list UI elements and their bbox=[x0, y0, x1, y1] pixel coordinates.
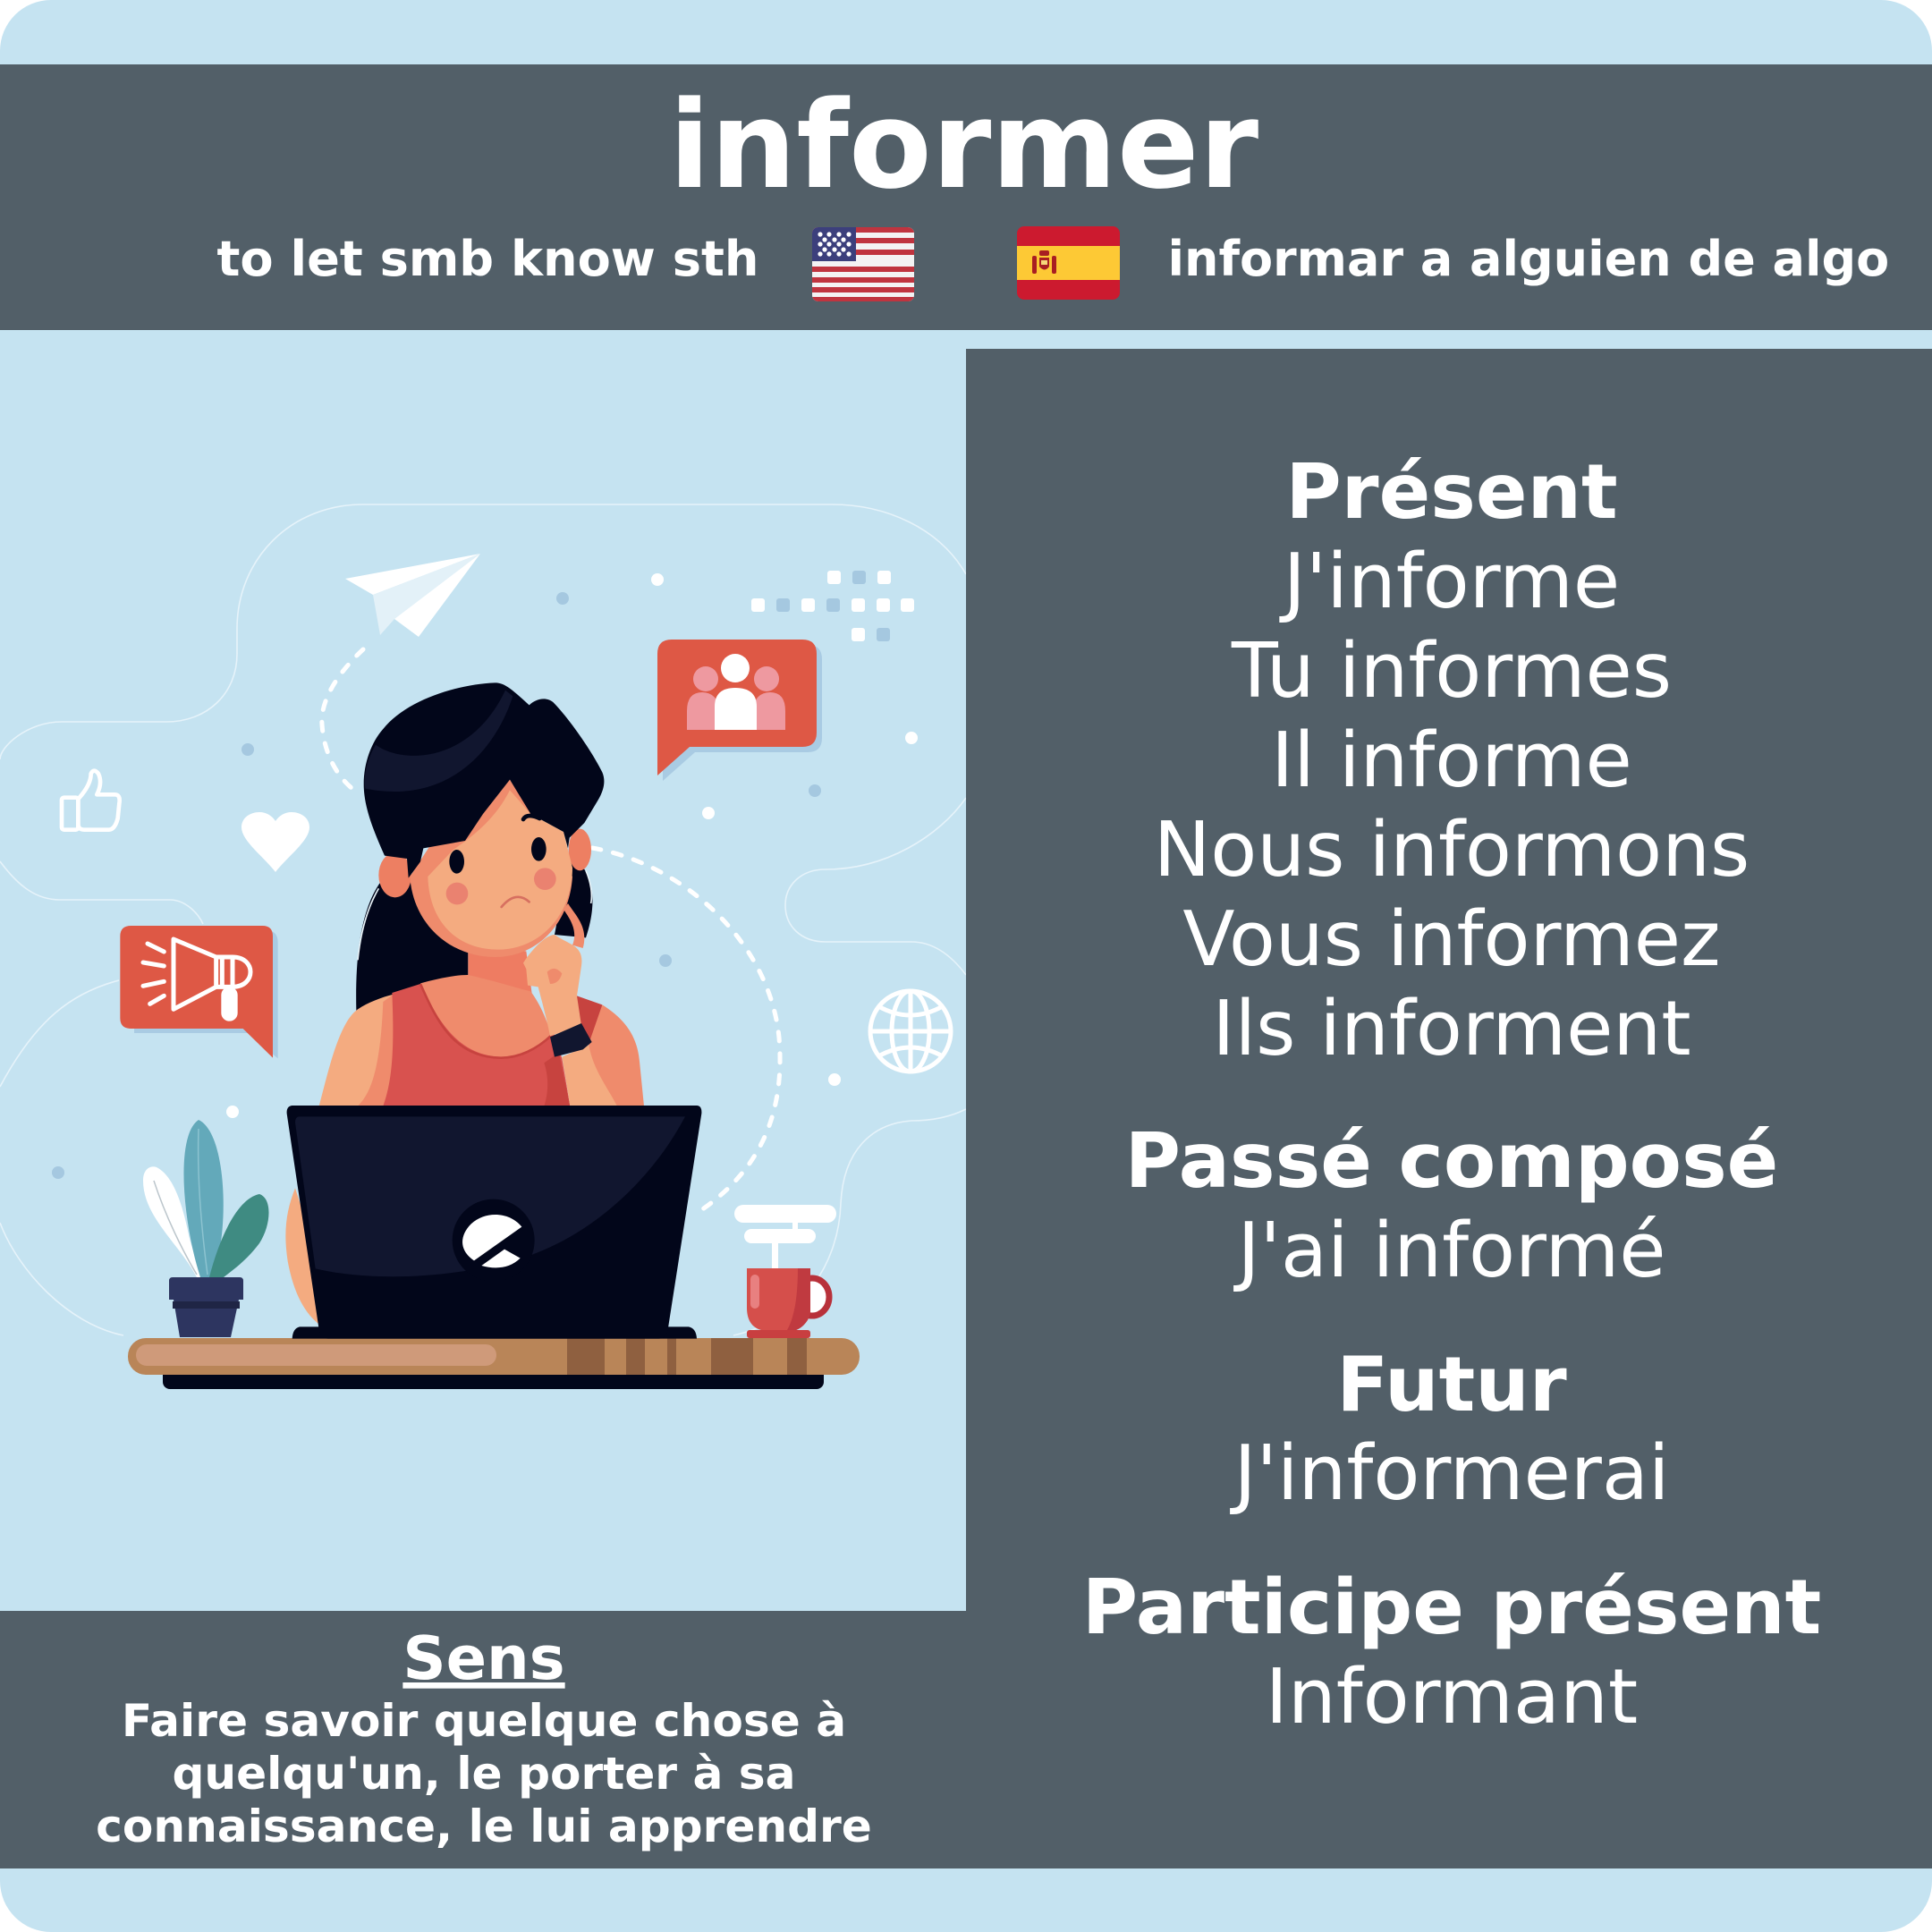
head bbox=[364, 682, 604, 957]
icon: US flag bbox=[812, 227, 914, 301]
icon: globe bbox=[870, 991, 951, 1072]
panel: illustration bbox=[0, 504, 966, 1389]
meaning text: connaissance, le lui apprendre bbox=[96, 1800, 872, 1852]
icon: Spanish flag bbox=[1017, 226, 1120, 300]
flight path dashes bbox=[322, 649, 363, 792]
icon: paper plane bbox=[345, 554, 480, 637]
tense: présent: Présent bbox=[1285, 448, 1618, 537]
tense: présent: Ils informent bbox=[1212, 985, 1691, 1073]
English translation: to let smb know sth bbox=[216, 231, 758, 287]
title: informer bbox=[669, 75, 1259, 216]
panel: conjugation background bbox=[966, 349, 1932, 1868]
Spanish translation: informar a alguien de algo bbox=[1168, 231, 1889, 287]
header band bbox=[0, 64, 1932, 330]
back hair bbox=[356, 856, 592, 1011]
tense: futur: Futur bbox=[1336, 1341, 1567, 1429]
panel: meaning background bbox=[0, 1611, 966, 1868]
decorative dots bbox=[52, 571, 918, 1179]
desk bbox=[128, 1338, 860, 1389]
conjugation list bbox=[1082, 448, 1821, 1741]
idea path dashes bbox=[592, 848, 780, 1214]
coffee mug bbox=[734, 1205, 836, 1338]
tense: présent: Nous informons bbox=[1154, 806, 1750, 894]
meaning text: quelqu'un, le porter à sa bbox=[172, 1747, 796, 1800]
tense: futur: J'informerai bbox=[1229, 1429, 1670, 1518]
icon: heart bbox=[242, 812, 309, 872]
hair bbox=[364, 682, 604, 878]
tense: passé composé: J'ai informé bbox=[1233, 1207, 1666, 1295]
woman bbox=[285, 682, 644, 1326]
tense: participe présent: Participe présent bbox=[1082, 1563, 1821, 1652]
icon: users speech bubble bbox=[657, 640, 822, 781]
tense: passé composé: Passé composé bbox=[1125, 1117, 1778, 1206]
tense: futur bbox=[1229, 1341, 1670, 1518]
meaning heading: Sens bbox=[402, 1623, 565, 1693]
tense: présent: Il informe bbox=[1271, 716, 1632, 805]
torso and arms bbox=[285, 951, 644, 1326]
tense: passé composé bbox=[1125, 1117, 1778, 1295]
tense: présent: Tu informes bbox=[1231, 627, 1672, 716]
meaning text: Faire savoir quelque chose à bbox=[122, 1694, 846, 1747]
wrist band bbox=[550, 1023, 592, 1057]
meaning text bbox=[96, 1694, 872, 1852]
hand on chin bbox=[523, 903, 592, 1057]
icon: megaphone speech bubble bbox=[120, 926, 278, 1058]
tense: participe présent bbox=[1082, 1563, 1821, 1741]
plant bbox=[143, 1120, 269, 1337]
tense: présent bbox=[1154, 448, 1750, 1073]
laptop bbox=[287, 1106, 701, 1339]
icon: thumbs up bbox=[62, 771, 120, 830]
tense: participe présent: Informant bbox=[1266, 1653, 1638, 1741]
tense: présent: Vous informez bbox=[1182, 895, 1721, 984]
tense: présent: J'informe bbox=[1279, 538, 1620, 626]
